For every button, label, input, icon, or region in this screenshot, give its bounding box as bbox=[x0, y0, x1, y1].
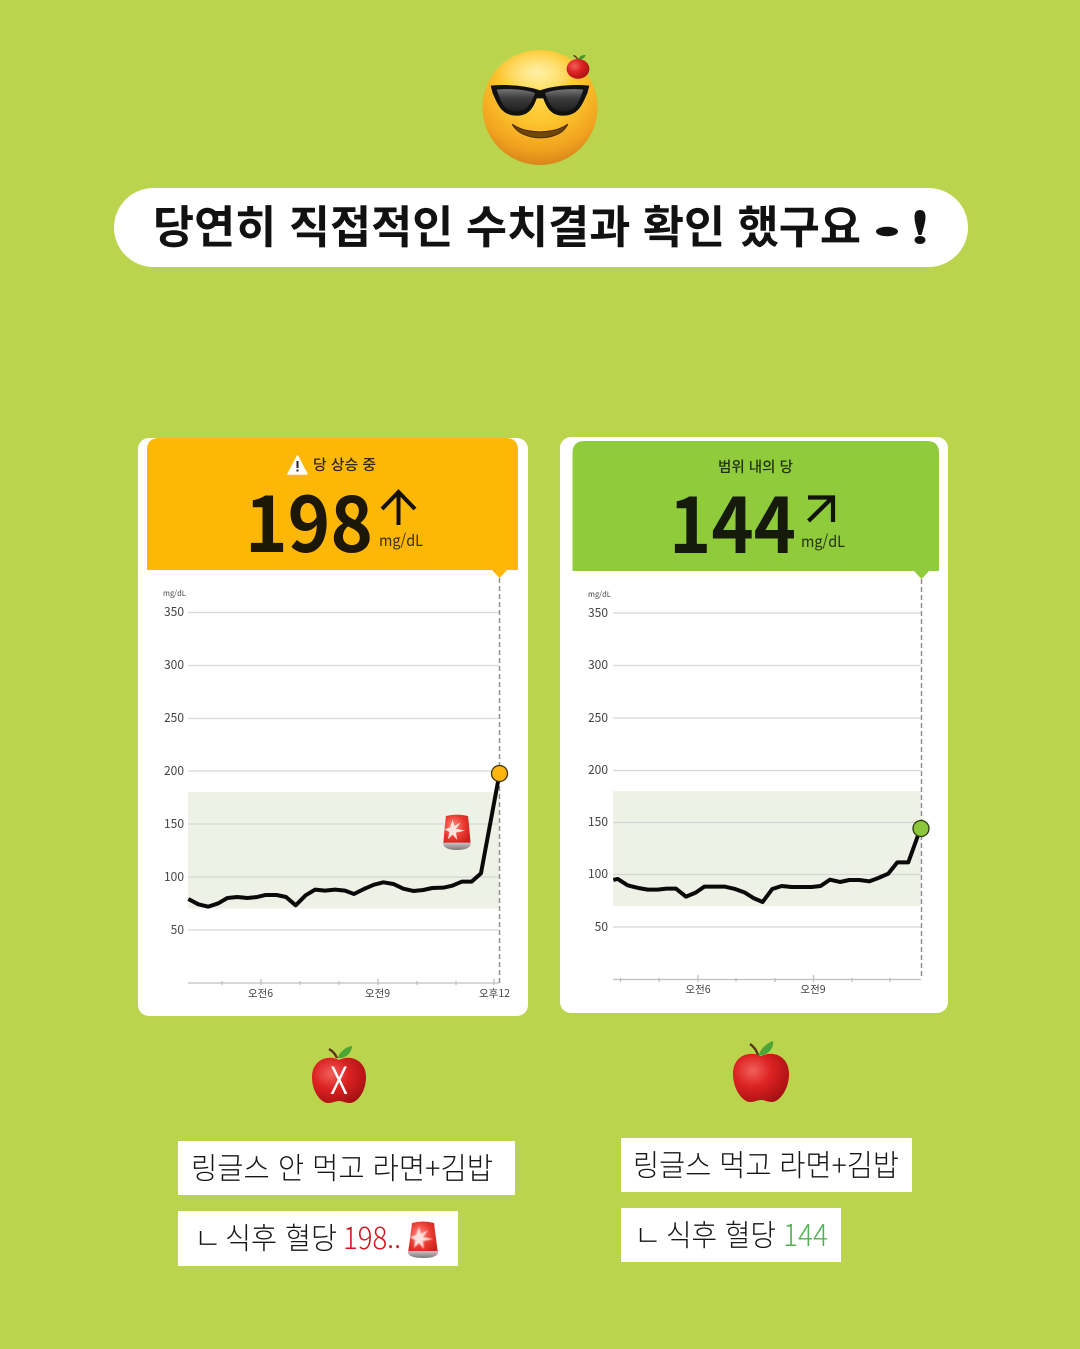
title text: 당연히 직접적인 수치결과 확인 했구요 bbox=[153, 191, 861, 256]
icon: sunglasses and smile bbox=[491, 85, 589, 138]
caption: blood sugar 144: 식후 혈당 bbox=[666, 1211, 776, 1255]
line chart: left: 50 bbox=[171, 921, 184, 938]
glucose value: 198 bbox=[245, 464, 373, 574]
status text: 당 상승 중 bbox=[313, 454, 376, 475]
icon: small apple bbox=[567, 55, 589, 79]
icon: apple with X bbox=[312, 1046, 366, 1103]
glucose value: 144 bbox=[669, 465, 796, 575]
icon: apple bbox=[733, 1041, 789, 1102]
caption: blood sugar 198: 식후 혈당 bbox=[225, 1214, 337, 1258]
caption: with supplement meal: 링글스 먹고 라면+김밥 bbox=[633, 1141, 899, 1185]
icon: siren bbox=[443, 815, 471, 850]
line chart: right: 350 bbox=[588, 604, 608, 621]
status text: 범위 내의 당 bbox=[718, 456, 793, 477]
line chart: left: 오전6 bbox=[248, 986, 273, 1001]
unit: mg/dL bbox=[379, 529, 423, 551]
title pill bbox=[114, 188, 968, 267]
caption: blood sugar 198: ㄴ bbox=[194, 1214, 222, 1258]
data line bbox=[188, 780, 498, 907]
line chart: left: 150 bbox=[164, 815, 184, 832]
data line bbox=[613, 830, 920, 902]
line chart: left bbox=[163, 578, 510, 1001]
line chart: left: 100 bbox=[164, 868, 184, 885]
line chart: right: 오전9 bbox=[800, 982, 826, 997]
panel: right glucose card bbox=[560, 437, 948, 1013]
line chart: right: mg/dL bbox=[588, 589, 611, 600]
icon: up arrow bbox=[382, 492, 415, 525]
current value marker bbox=[492, 766, 508, 782]
unit: mg/dL bbox=[801, 530, 845, 552]
caption: blood sugar 198 bbox=[178, 1211, 458, 1266]
line chart: left: mg/dL bbox=[163, 588, 186, 599]
line chart: right: 200 bbox=[588, 761, 608, 778]
line chart: right: 150 bbox=[588, 813, 608, 830]
panel header: in range glucose bbox=[572, 441, 939, 579]
caption: blood sugar 144 bbox=[621, 1208, 841, 1262]
line chart: left: 200 bbox=[164, 762, 184, 779]
line chart: right: 50 bbox=[595, 918, 608, 935]
line chart: left: 오전9 bbox=[365, 986, 390, 1001]
icon: siren bbox=[408, 1222, 438, 1258]
caption: blood sugar 144: ㄴ bbox=[634, 1211, 662, 1255]
icon: sunglasses face emoji with apple bbox=[482, 50, 598, 165]
line chart: right bbox=[588, 579, 929, 997]
panel header: rising glucose bbox=[147, 438, 518, 578]
line chart: left: 350 bbox=[164, 603, 184, 620]
line chart: right: 300 bbox=[588, 656, 608, 673]
icon: diagonal arrow bbox=[808, 498, 833, 522]
panel: left glucose card bbox=[138, 438, 528, 1016]
caption: without supplement meal: 링글스 안 먹고 라면+김밥 bbox=[191, 1144, 493, 1188]
line chart: left: 300 bbox=[164, 656, 184, 673]
current value marker bbox=[913, 820, 929, 836]
line chart: right: 100 bbox=[588, 865, 608, 882]
line chart: left: 오후12 bbox=[479, 986, 510, 1001]
icon: apple with X: X bbox=[330, 1059, 348, 1103]
line chart: right: 250 bbox=[588, 709, 608, 726]
icon: warning triangle bbox=[288, 456, 307, 474]
title dash and exclamation bbox=[876, 210, 926, 244]
caption: blood sugar 198: 198.. bbox=[343, 1214, 401, 1258]
caption: blood sugar 144: 144 bbox=[783, 1211, 828, 1255]
line chart: right: 오전6 bbox=[685, 982, 711, 997]
line chart: left: 250 bbox=[164, 709, 184, 726]
